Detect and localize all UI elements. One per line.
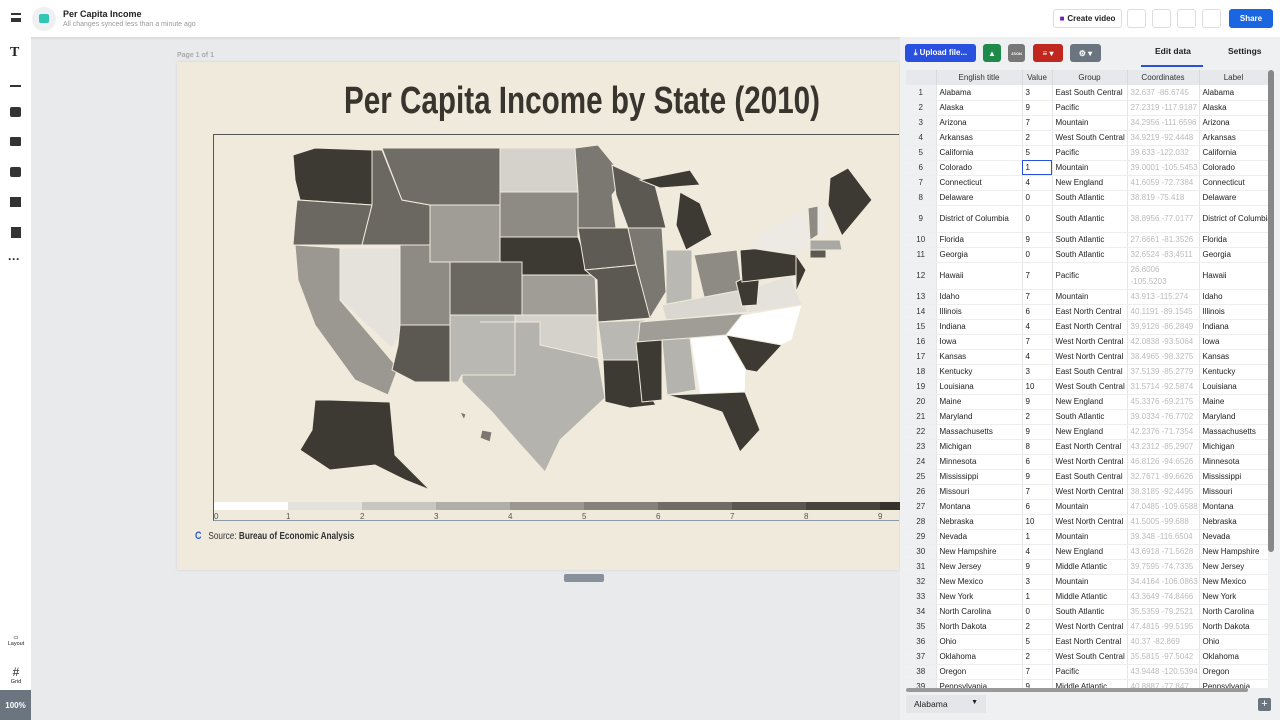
page card [177, 62, 899, 570]
left sidebar: T [10, 45, 19, 60]
legend: 8 [804, 512, 809, 521]
map frame [213, 134, 913, 521]
data table: 6 [919, 163, 923, 172]
data table: 43.3649 -74.8466 [1130, 592, 1193, 601]
data table: Iowa [940, 337, 956, 346]
create video button: Create video [1067, 14, 1115, 23]
data table: 0 [1026, 193, 1030, 202]
data table: English title [959, 73, 999, 82]
data table: 45.3376 -69.2175 [1130, 397, 1193, 406]
data table: 1 [1026, 163, 1030, 172]
add sheet button: + [1261, 698, 1268, 710]
zoom indicator [0, 690, 31, 720]
data table: North Dakota [1202, 622, 1250, 631]
data table: Mountain [1056, 292, 1088, 301]
data table: Massachusetts [1202, 427, 1256, 436]
data table: West North Central [1056, 337, 1123, 346]
icon: project [32, 7, 56, 31]
data table: Alaska [1202, 103, 1227, 112]
layout control [8, 635, 24, 647]
data table: 38.8956 -77.0177 [1130, 214, 1193, 222]
data table: 47.0485 -109.6588 [1130, 502, 1198, 511]
data table: 4 [1026, 322, 1030, 331]
data table: 38.819 -75.418 [1130, 193, 1184, 202]
data table: West South Central [1056, 133, 1125, 142]
data table: 6 [1026, 457, 1030, 466]
data table: West South Central [1056, 382, 1125, 391]
data table: 9 [1026, 397, 1030, 406]
data table: Mississippi [1202, 472, 1241, 481]
legend: 4 [508, 512, 513, 521]
data table: 39.9126 -86.2849 [1130, 322, 1193, 331]
data table: South Atlantic [1056, 235, 1104, 244]
data table: 40.37 -82.869 [1130, 637, 1180, 646]
data table: Kentucky [940, 367, 972, 376]
data table: Indiana [940, 322, 966, 331]
data table: 31.5714 -92.5874 [1130, 382, 1193, 391]
data table: Louisiana [1202, 382, 1237, 391]
data table: 27.6661 -81.3526 [1130, 235, 1193, 244]
data table: West North Central [1056, 457, 1123, 466]
data table: Mountain [1056, 118, 1088, 127]
data table: 42.2376 -71.7354 [1130, 427, 1193, 436]
data table: 4 [919, 133, 923, 142]
data table: Montana [1202, 502, 1234, 511]
data table: Michigan [940, 442, 972, 451]
data table: Arizona [940, 118, 967, 127]
data table: 2 [1026, 133, 1030, 142]
data table: Hawaii [1202, 270, 1227, 280]
data table: 7 [1026, 292, 1030, 301]
data table: Missouri [940, 487, 969, 496]
data table: West North Central [1056, 352, 1123, 361]
data table: 9 [1026, 562, 1030, 571]
data table: Alabama [1202, 88, 1234, 97]
data table: 39.0001 -105.5453 [1130, 163, 1198, 172]
data table: 43.6918 -71.5628 [1130, 547, 1193, 556]
data table: Nebraska [940, 517, 974, 526]
right panel: ⚙ ▾ [1079, 48, 1092, 58]
data table: 37.5139 -85.2779 [1130, 367, 1193, 376]
data table: East North Central [1056, 307, 1121, 316]
data table: 33 [916, 592, 925, 601]
page label: Page 1 of 1 [177, 52, 214, 59]
data table: 31 [916, 562, 925, 571]
sheet selector [906, 695, 986, 713]
data table: 24 [916, 457, 925, 466]
data table: East South Central [1056, 88, 1123, 97]
left sidebar: ··· [8, 252, 20, 266]
left sidebar [0, 37, 31, 720]
data table: Ohio [1202, 637, 1219, 646]
data table: North Carolina [1202, 607, 1254, 616]
data table: 43.913 -115.274 [1130, 292, 1188, 301]
data table: Nebraska [1202, 517, 1237, 526]
right panel: Settings [1228, 46, 1262, 56]
data table: 10 [1026, 517, 1034, 526]
data table: 32.7671 -89.6626 [1130, 472, 1193, 481]
data table: Kansas [940, 352, 966, 361]
data table: 35.5359 -79.2521 [1130, 607, 1193, 616]
data table: 42.0838 -93.5064 [1130, 337, 1193, 346]
data table: Kentucky [1202, 367, 1235, 376]
data table: 4 [1026, 352, 1030, 361]
data table: Colorado [1202, 163, 1235, 172]
data table: New Hampshire [1202, 547, 1259, 556]
data table: Oregon [940, 667, 966, 676]
sheet selector: Alabama [914, 699, 948, 709]
data table: 10 [916, 235, 925, 244]
data table: 23 [916, 442, 925, 451]
data table: Massachusetts [940, 427, 993, 436]
data table: 43.9448 -120.5394 [1130, 667, 1198, 676]
data table: 46.8126 -94.6526 [1130, 457, 1193, 466]
data table: Illinois [1202, 307, 1225, 316]
data table: 29 [916, 532, 925, 541]
horizontal scrollbar [906, 688, 1248, 692]
data table: Florida [940, 235, 964, 244]
data table: New Jersey [1202, 562, 1244, 571]
data table: Pacific [1056, 103, 1079, 112]
data table: South Atlantic [1056, 193, 1104, 202]
data table: Label [1224, 73, 1243, 82]
data table: East South Central [1056, 367, 1123, 376]
data table: 39.633 -122.032 [1130, 148, 1189, 157]
data table: 41.6059 -72.7384 [1130, 178, 1193, 187]
data table: 26.6006 -105.5203 [1130, 264, 1167, 286]
data table: Oregon [1202, 667, 1229, 676]
data table: Mountain [1056, 577, 1088, 586]
data table: Middle Atlantic [1056, 592, 1107, 601]
data table: 7 [919, 178, 923, 187]
data table: Oklahoma [1202, 652, 1239, 661]
tabs: Edit data [1155, 46, 1191, 56]
data table: 11 [917, 250, 925, 259]
data table: Minnesota [940, 457, 976, 466]
data table: Mountain [1056, 532, 1088, 541]
data table: 7 [1026, 270, 1030, 280]
data table: North Dakota [940, 622, 987, 631]
data table: New England [1056, 427, 1103, 436]
data table: 22 [916, 427, 925, 436]
data table: East North Central [1056, 637, 1121, 646]
data table: Kansas [1202, 352, 1229, 361]
data table: 41.5005 -99.688 [1130, 517, 1189, 526]
data table: Pacific [1056, 270, 1079, 280]
legend: 0 [214, 512, 219, 521]
data table: New England [1056, 397, 1103, 406]
data table: 37 [916, 652, 925, 661]
data table: West North Central [1056, 517, 1123, 526]
data table: Montana [940, 502, 971, 511]
data table: 5 [1026, 148, 1030, 157]
data table: Delaware [940, 193, 973, 202]
data table: Pacific [1056, 148, 1079, 157]
layout control: Layout [8, 641, 24, 647]
data table: 9 [1026, 427, 1030, 436]
legend: 7 [730, 512, 735, 521]
data table: 28 [916, 517, 925, 526]
sheet selector: ▼ [971, 699, 978, 706]
data table [906, 70, 1268, 688]
data table: 21 [916, 412, 925, 421]
data table: 3 [1026, 367, 1030, 376]
data table: 39.0334 -76.7702 [1130, 412, 1193, 421]
data table: West South Central [1056, 652, 1125, 661]
grid control: Grid [11, 679, 21, 685]
right panel [900, 37, 1280, 720]
data table: 38 [916, 667, 925, 676]
data table: 27.2319 -117.9187 [1130, 103, 1197, 112]
data table: Group [1078, 73, 1101, 82]
create video button [1053, 9, 1122, 28]
data table: Delaware [1202, 193, 1236, 202]
data table: New Mexico [940, 577, 983, 586]
data table: 20 [916, 397, 925, 406]
data table: Hawaii [940, 270, 964, 280]
data table: Arkansas [940, 133, 973, 142]
data table: 25 [916, 472, 925, 481]
data table: 32.637 -86.6745 [1130, 88, 1189, 97]
data table: South Atlantic [1056, 607, 1104, 616]
data table: 9 [919, 214, 923, 222]
data table: 0 [1026, 250, 1030, 259]
legend [214, 502, 900, 521]
data table: California [940, 148, 973, 157]
data table: 3 [1026, 577, 1030, 586]
data table: 7 [1026, 487, 1030, 496]
data table: 26 [916, 487, 925, 496]
data table: 9 [1026, 103, 1030, 112]
data table: 0 [1026, 214, 1030, 222]
data table: 9 [1026, 472, 1030, 481]
data table: 16 [916, 337, 925, 346]
data table: Georgia [940, 250, 968, 259]
data table: 2 [1026, 622, 1030, 631]
data table: 0 [1026, 607, 1030, 616]
data table: East South Central [1056, 472, 1123, 481]
data table: South Atlantic [1056, 214, 1104, 222]
data table: Illinois [940, 307, 962, 316]
data table: East North Central [1056, 322, 1121, 331]
data table: Nevada [940, 532, 967, 541]
data table: Pacific [1056, 667, 1079, 676]
data table: 2 [919, 103, 923, 112]
data table: South Atlantic [1056, 250, 1104, 259]
grid control: # [13, 665, 19, 679]
data table: Minnesota [1202, 457, 1239, 466]
zoom indicator: 100% [5, 700, 26, 710]
data table: 7 [1026, 118, 1030, 127]
data table: New Hampshire [940, 547, 996, 556]
data table: 2 [1026, 412, 1030, 421]
legend: 6 [656, 512, 661, 521]
data table: 1 [1026, 532, 1030, 541]
data table: North Carolina [940, 607, 991, 616]
create video button: ■ [1060, 14, 1064, 23]
data table: 35 [916, 622, 925, 631]
sync status: All changes synced less than a minute ago [63, 21, 196, 28]
data table: Middle Atlantic [1056, 562, 1107, 571]
icon: menu [11, 13, 21, 22]
legend: 9 [878, 512, 883, 521]
data table: Idaho [940, 292, 960, 301]
data table: Idaho [1202, 292, 1223, 301]
data table: 8 [919, 193, 923, 202]
data table: 34 [916, 607, 925, 616]
data table: 43.2312 -85.2907 [1130, 442, 1193, 451]
share button: Share [1240, 14, 1262, 23]
data table: West North Central [1056, 487, 1123, 496]
data table: Connecticut [940, 178, 982, 187]
data table: Missouri [1202, 487, 1232, 496]
data table: New York [940, 592, 973, 601]
data table: 3 [1026, 88, 1030, 97]
scrollbar [1268, 70, 1274, 552]
data table: Alabama [940, 88, 971, 97]
data table: 1 [919, 88, 923, 97]
data table: Florida [1202, 235, 1227, 244]
data table: 38.4965 -98.3275 [1130, 352, 1193, 361]
buttons [905, 44, 976, 62]
share button [1229, 9, 1273, 28]
layout control: ▭ [13, 635, 19, 641]
data table: 7 [1026, 667, 1030, 676]
data table: Georgia [1202, 250, 1231, 259]
right panel: ≡ ▾ [1043, 48, 1053, 58]
data table: Maine [1202, 397, 1224, 406]
data table: 7 [1026, 337, 1030, 346]
data table: Maryland [940, 412, 972, 421]
data table: Coordinates [1141, 73, 1185, 82]
data table: New Jersey [940, 562, 981, 571]
data table: 8 [1026, 442, 1030, 451]
data table: 34.9219 -92.4448 [1130, 133, 1193, 142]
data table: 17 [916, 352, 925, 361]
data table: New York [1202, 592, 1236, 601]
data table: Michigan [1202, 442, 1235, 451]
data table: 30 [916, 547, 925, 556]
legend: 3 [434, 512, 439, 521]
data table: 32.6524 -83.4511 [1130, 250, 1193, 259]
data table: Indiana [1202, 322, 1229, 331]
toolbar icons [1127, 9, 1221, 28]
data table: Arizona [1202, 118, 1230, 127]
data table: New England [1056, 547, 1103, 556]
data table: Mississippi [940, 472, 978, 481]
data table: Nevada [1202, 532, 1230, 541]
data table: 36 [916, 637, 925, 646]
data table: West North Central [1056, 622, 1123, 631]
right panel: JSON [1011, 50, 1022, 56]
data table: 27 [916, 502, 925, 511]
data table: 38.3185 -92.4495 [1130, 487, 1193, 496]
data table: 34.2956 -111.6596 [1130, 118, 1196, 127]
grid control [11, 665, 21, 685]
data table: Mountain [1056, 163, 1088, 172]
add sheet button [1258, 698, 1271, 711]
right panel: ▲ [988, 48, 996, 58]
data table: Ohio [940, 637, 956, 646]
data table: 34.4164 -106.0863 [1130, 577, 1198, 586]
data table: New Mexico [1202, 577, 1246, 586]
data table: Iowa [1202, 337, 1219, 346]
data table: Alaska [940, 103, 964, 112]
project title: Per Capita Income [63, 9, 142, 19]
choropleth map [214, 146, 900, 521]
data table: 15 [916, 322, 925, 331]
title: Per Capita Income by State (2010) [344, 80, 820, 122]
buttons: ⤓ Upload file... [914, 48, 967, 57]
data table: 12 [916, 270, 925, 280]
legend: 5 [582, 512, 587, 521]
data table: South Atlantic [1056, 412, 1104, 421]
data table: 6 [1026, 502, 1030, 511]
resize handle [564, 574, 604, 582]
data table: 5 [919, 148, 923, 157]
data table: Colorado [940, 163, 972, 172]
top bar [0, 0, 1280, 37]
data table: 9 [1026, 235, 1030, 244]
legend: 1 [286, 512, 291, 521]
data table: Mountain [1056, 502, 1088, 511]
data table: 10 [1026, 382, 1034, 391]
data table: 14 [916, 307, 925, 316]
data table: 6 [1026, 307, 1030, 316]
data table: Louisiana [940, 382, 974, 391]
data table: Maine [940, 397, 961, 406]
data table: 47.4815 -99.5195 [1130, 622, 1193, 631]
source: C Source: Bureau of Economic Analysis [195, 530, 354, 542]
data table: Arkansas [1202, 133, 1236, 142]
data table: Connecticut [1202, 178, 1245, 187]
data table: 13 [916, 292, 925, 301]
data table: 4 [1026, 547, 1030, 556]
data table: Value [1027, 73, 1047, 82]
data table: East North Central [1056, 442, 1121, 451]
data table: 39.7595 -74.7335 [1130, 562, 1193, 571]
data table: Oklahoma [940, 652, 976, 661]
data table: 1 [1026, 592, 1030, 601]
data table: 19 [916, 382, 925, 391]
data table: 39.348 -116.6504 [1130, 532, 1193, 541]
data table: District of Columbia [940, 214, 1009, 222]
data table: New England [1056, 178, 1103, 187]
data table: 18 [916, 367, 925, 376]
data table: 35.5815 -97.5042 [1130, 652, 1193, 661]
data table: 40.1191 -89.1545 [1130, 307, 1193, 316]
data table: 2 [1026, 652, 1030, 661]
legend: 2 [360, 512, 365, 521]
data table: 3 [919, 118, 923, 127]
data table: 32 [916, 577, 925, 586]
data table: 5 [1026, 637, 1030, 646]
data table: 4 [1026, 178, 1030, 187]
data table: California [1202, 148, 1236, 157]
data table: Maryland [1202, 412, 1235, 421]
